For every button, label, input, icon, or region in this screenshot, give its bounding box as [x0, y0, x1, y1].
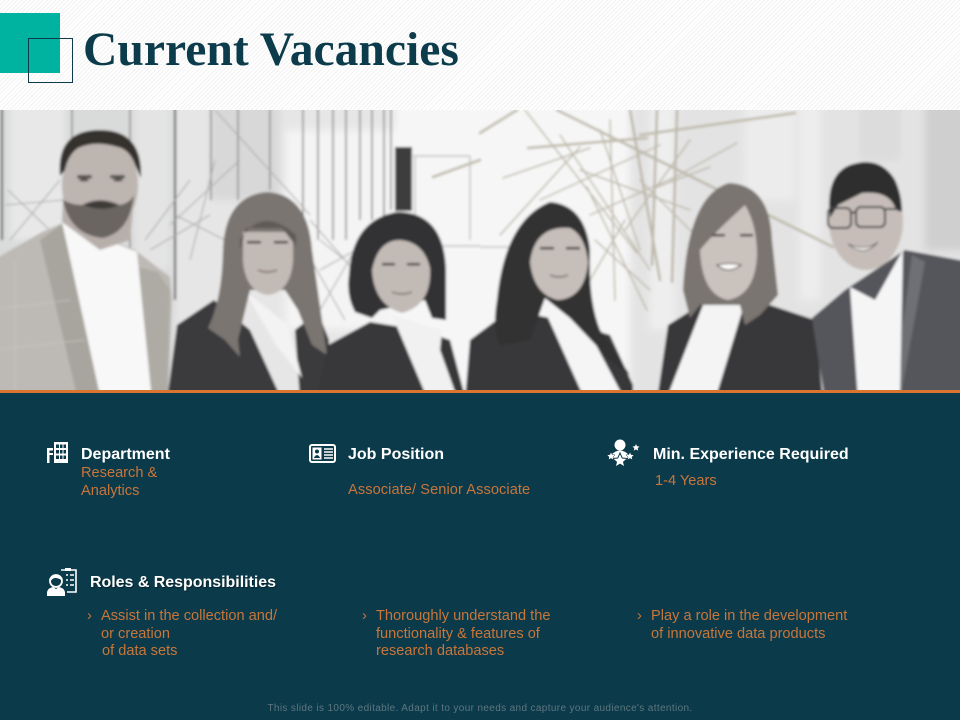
person 6: [812, 162, 960, 400]
bullet 1: of data sets: [102, 643, 177, 659]
job position heading: Job Position: [348, 446, 444, 463]
person 2: [167, 192, 329, 400]
bullet 1: [87, 608, 277, 659]
logo accent squares: [0, 13, 73, 83]
person 4: [465, 202, 633, 400]
experience text: 1-4 Years: [655, 473, 717, 489]
window frames: [72, 100, 391, 250]
department text: Analytics: [81, 483, 139, 499]
roles heading: Roles & Responsibilities: [90, 574, 276, 591]
department heading: Department: [81, 446, 170, 463]
experience heading: Min. Experience Required: [653, 446, 849, 463]
team photo: [0, 110, 960, 390]
bullet 1: or creation: [101, 626, 170, 642]
department icon: [47, 442, 68, 463]
bullet 2: [362, 608, 550, 659]
title: Current Vacancies: [83, 24, 459, 76]
bullet 2: Thoroughly understand the: [376, 608, 550, 624]
bullet 2: research databases: [376, 643, 504, 659]
department text: [81, 465, 157, 499]
chandelier sticks: [433, 110, 833, 310]
orange divider bar: [0, 390, 960, 393]
roles icon: [47, 568, 77, 596]
bullet 1: Assist in the collection and/: [101, 608, 277, 624]
job position icon: [309, 444, 336, 463]
bullet 3: Play a role in the development: [651, 608, 847, 624]
department text: Research &: [81, 465, 157, 481]
person 3: [316, 212, 466, 400]
person 5: [657, 183, 823, 400]
bullet 3: [637, 608, 848, 642]
job position text: Associate/ Senior Associate: [348, 482, 530, 498]
bullet 3: ›: [637, 608, 642, 624]
header background: [0, 0, 960, 110]
photo background: [0, 100, 960, 400]
footer note: This slide is 100% editable. Adapt it to your needs and capture your audience's attention.: [267, 703, 693, 714]
bottom panel: [0, 393, 960, 720]
bullet 2: ›: [362, 608, 367, 624]
person 1: [0, 130, 172, 400]
bullet 2: functionality & features of: [376, 626, 540, 642]
bullet 3: of innovative data products: [651, 626, 825, 642]
bullet 1: ›: [87, 608, 92, 624]
experience icon: [608, 440, 640, 466]
